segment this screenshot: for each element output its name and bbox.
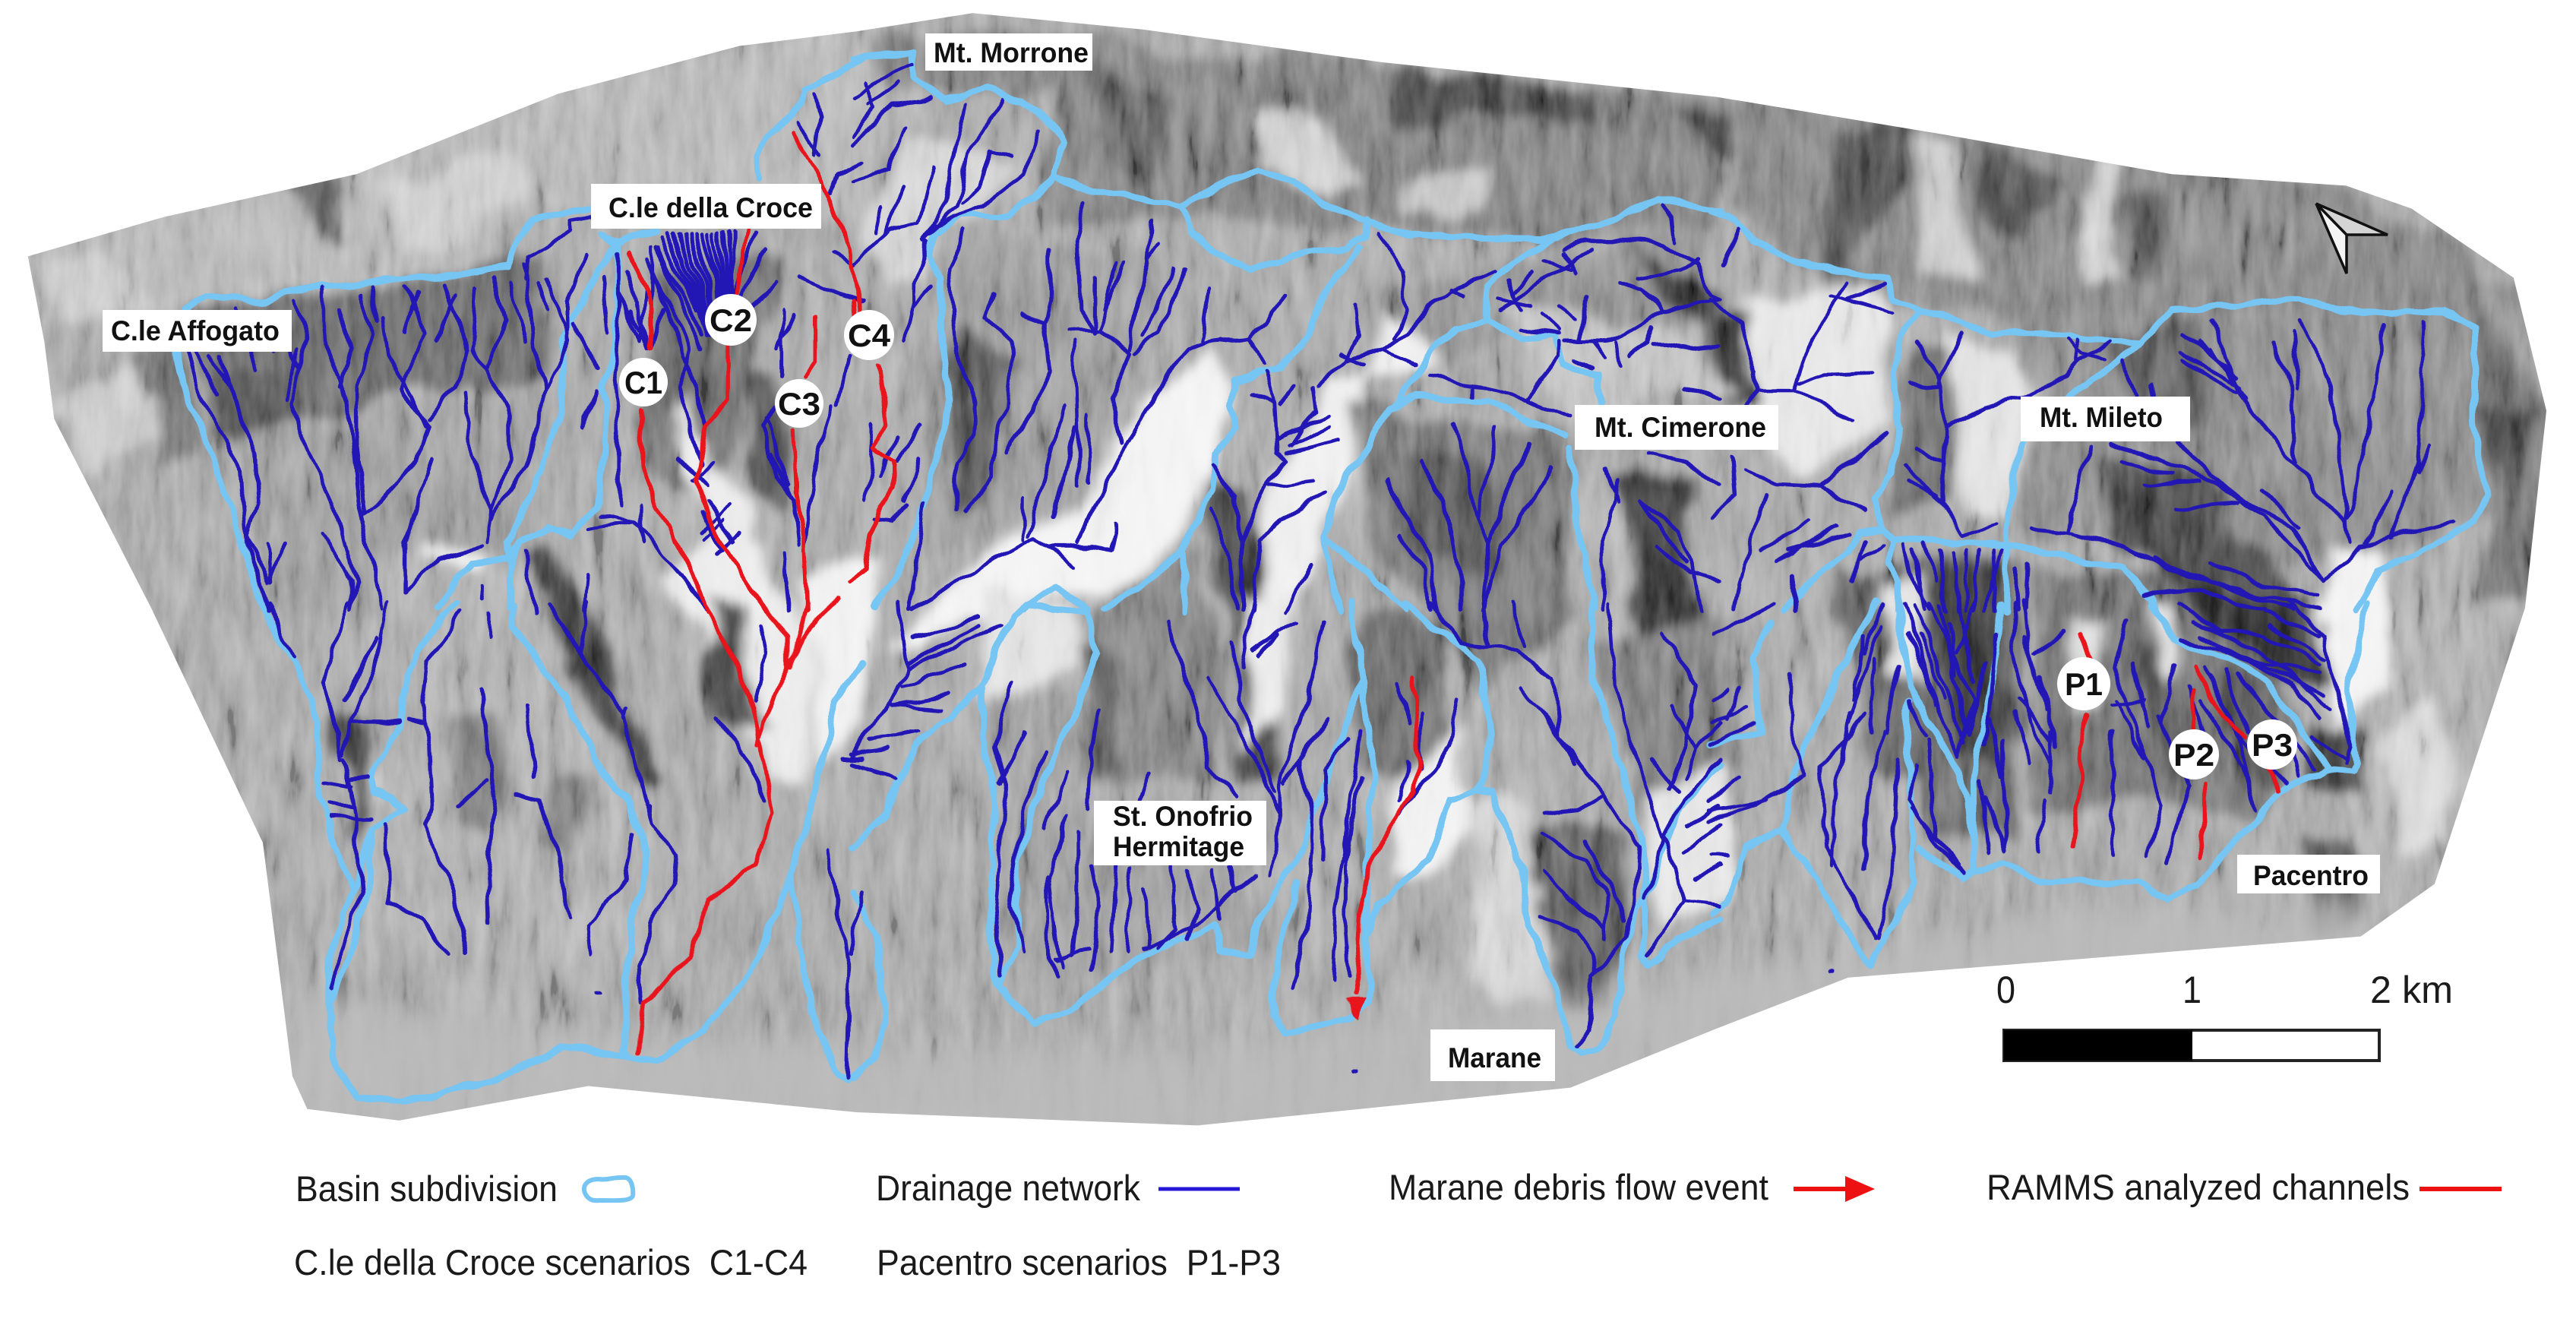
place label: Marane: Marane [1448,1042,1541,1073]
place label: Pacentro [2237,855,2380,893]
place label: Mt. Mileto: Mt. Mileto [2040,402,2163,433]
lowland plain [280,896,2366,1150]
place label: Mt. Cimerone: Mt. Cimerone [1595,412,1766,443]
place label: Mt. Mileto [2021,397,2190,441]
scenario marker P2 [2169,729,2219,779]
drainage network [186,64,2453,1077]
scenario marker C1 [619,358,668,406]
scenario marker C3 [775,379,823,428]
scenario marker P3 [2247,719,2297,770]
basin subdivision boundaries [175,50,2486,1102]
legend: RAMMS analyzed channels: RAMMS analyzed channels [1987,1167,2410,1207]
place label: St. Onofrio Hermitage: St. Onofrio [1113,801,1253,832]
scenario marker C2: C2 [710,302,752,338]
place label: St. Onofrio Hermitage [1094,801,1266,865]
place label: C.le della Croce [591,184,821,229]
scenario marker C2 [705,294,757,346]
legend: Pacentro scenarios: Pacentro scenarios P1-P3 [877,1242,1281,1282]
scenario marker C4: C4 [848,318,891,353]
north arrow [2316,204,2388,274]
legend: drainage network: Drainage network [876,1168,1140,1208]
scale bar [1996,969,2453,1061]
RAMMS analyzed channels and Marane debris flow [630,134,2278,1051]
place label: Marane [1430,1029,1555,1081]
scenario marker P3: P3 [2252,727,2293,763]
place label: St. Onofrio Hermitage: Hermitage [1113,831,1244,862]
legend: C.le della Croce scenarios: C.le della Croce scenarios C1-C4 [294,1242,808,1282]
scale bar: 2 km [2370,969,2453,1011]
place label: Mt. Morrone: Mt. Morrone [934,37,1089,68]
legend: Marane debris flow event: Marane debris flow event [1389,1167,1768,1207]
scenario marker C1: C1 [624,365,662,400]
hillshade texture [28,14,2546,1067]
place label: C.le Affogato: C.le Affogato [111,315,280,346]
place label: C.le Affogato [103,310,292,352]
scenario marker C4 [844,310,894,360]
scenario marker P2: P2 [2173,737,2214,773]
scale bar: 0 [1996,969,2015,1011]
scale bar: 1 [2182,969,2201,1011]
place label: Pacentro: Pacentro [2253,860,2369,891]
scenario marker P1: P1 [2065,666,2103,702]
scenario marker P1 [2057,657,2110,710]
place label: Mt. Cimerone [1575,405,1778,450]
place label: C.le della Croce: C.le della Croce [608,192,813,223]
legend: basin subdivision: Basin subdivision [296,1168,558,1209]
scenario marker C3: C3 [778,386,820,422]
